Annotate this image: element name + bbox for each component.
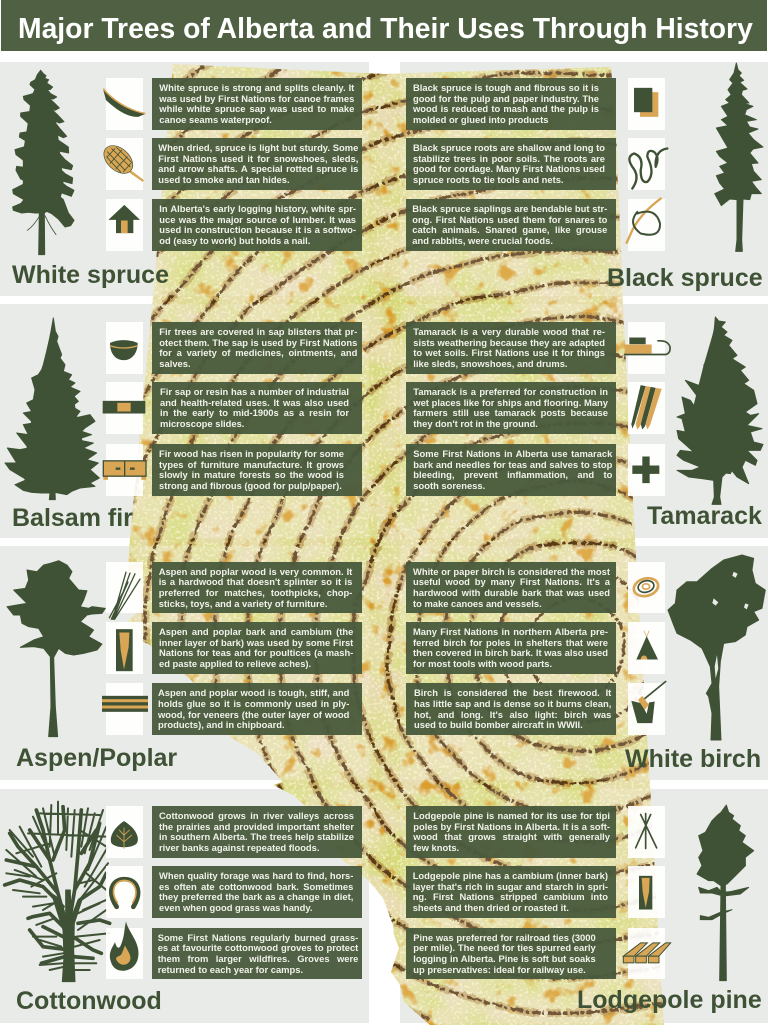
text: black spruce snares: Black spruce saplings are bendable but str-: [412, 203, 607, 214]
text: black spruce roots: good for cordage. Many First Nations used: [413, 163, 605, 174]
text: spruce snowshoes: First Nations used it for snowshoes, sleds,: [158, 153, 358, 164]
text: aspen plywood: holds glue so it is commonly used in ply-: [158, 698, 349, 709]
text: tamarack construction: Tamarack is a preferred for construction in: [413, 386, 608, 397]
icon: microscope slide: [106, 382, 143, 434]
text: birch vessels: White or paper birch is considered the most: [413, 566, 610, 577]
text: cottonwood horses: [152, 866, 362, 918]
text: tamarack medicine: bark and needles for teas and salves to stop: [413, 459, 612, 470]
text: aspen matches: preferred for matches, toothpicks, chop-: [159, 587, 352, 598]
text: birch vessels: [406, 562, 616, 613]
text: cottonwood horses: they preferred the bark as a change in diet,: [159, 891, 353, 902]
text: fir sap: otect them. The sap is used by First Nations: [159, 337, 357, 348]
text: tamarack durable: Tamarack is a very durable wood that re-: [413, 326, 605, 337]
text: spruce lumber: In Alberta's early logging history, white spr-: [159, 203, 356, 214]
text: black spruce pulp: wood is reduced to mash and the pulp is: [413, 103, 599, 114]
icon: bowl of sap: [106, 322, 143, 374]
text: cottonwood burning: [152, 928, 362, 979]
text: aspen poultices: inner layer of bark) was used by some First: [159, 637, 353, 648]
text: lodgepole cambium: Lodgepole pine has a cambium (inner bark): [413, 870, 608, 881]
heading: Lodgepole pine: Lodgepole pine: [577, 986, 762, 1014]
text: tamarack construction: [406, 382, 616, 434]
title banner: Major Trees of Alberta and Their Uses Through History: [18, 12, 753, 44]
text: spruce snowshoes: [152, 138, 362, 190]
text: fir resin: and health-related uses. It was also used: [160, 397, 349, 408]
text: cottonwood shelter: river banks against repeated floods.: [159, 842, 319, 853]
text: fir sap: for a variety of medicines, ointments, and: [159, 347, 357, 358]
text: aspen plywood: [152, 683, 362, 735]
text: birch shelters: [406, 622, 616, 674]
text: fir sap: salves.: [159, 358, 191, 369]
text: cottonwood horses: even when good grass was handy.: [159, 902, 313, 913]
icon: snowshoe: [106, 138, 143, 190]
text: fir furniture: slowly in mature forests so the wood is: [159, 469, 344, 480]
icon: paper pulp sheets: [628, 78, 665, 130]
text: tamarack durable: [406, 322, 616, 374]
text: spruce lumber: uce was the major source of lumber. It was: [159, 214, 356, 225]
text: birch firewood: has little sap and is dense so it burns clean,: [414, 698, 611, 709]
tree: cottonwood silhouette: [2, 800, 112, 982]
heading: Tamarack: Tamarack: [647, 502, 762, 530]
text: cottonwood shelter: Cottonwood grows in river valleys across: [159, 810, 354, 821]
text: cottonwood horses: When quality forage was hard to find, hors-: [159, 870, 353, 881]
icon: furniture cabinet: [106, 444, 143, 496]
icon: axe in stump: [628, 683, 665, 735]
text: black spruce snares: ong. First Nations used them for snares to: [412, 214, 607, 225]
text: tamarack construction: wet places like for ships and flooring. Many: [413, 397, 608, 408]
tree: lodgepole pine silhouette: [696, 804, 754, 982]
text: birch firewood: [406, 683, 616, 735]
text: tamarack medicine: bleeding, prevent inflammation, and to: [413, 469, 612, 480]
heading: Balsam fir: Balsam fir: [12, 504, 133, 532]
text: black spruce roots: Black spruce roots are shallow and long to: [413, 142, 605, 153]
text: birch firewood: hot, and long. It's also light: birch was: [414, 709, 611, 720]
text: birch vessels: useful wood by many First Nations. It's a: [413, 576, 610, 587]
text: cottonwood burning: Some First Nations regularly burned grass-: [158, 932, 358, 943]
text: spruce canoes: while white spruce sap was used to make: [159, 103, 354, 114]
panel: tamarack: [400, 304, 768, 538]
panel: cottonwood: [0, 789, 369, 1023]
text: fir sap: Fir trees are covered in sap blisters that pr-: [159, 326, 357, 337]
icon: fence posts: [628, 382, 665, 434]
text: cottonwood shelter: in southern Alberta. The trees help stabilize: [159, 831, 354, 842]
text: cottonwood burning: them from larger wildfires. Groves were: [158, 953, 358, 964]
panel: white spruce: [0, 62, 369, 296]
text: fir resin: [152, 382, 362, 434]
text: black spruce pulp: Black spruce is tough and fibrous so it is: [413, 82, 599, 93]
text: tamarack medicine: sooth soreness.: [413, 480, 485, 491]
text: birch shelters: ferred birch for poles in shelters that were: [413, 637, 608, 648]
text: aspen poultices: Nations for teas and for poultices (a mash-: [159, 647, 353, 658]
text: lodgepole cambium: [406, 866, 616, 918]
icon: sled: [628, 322, 665, 374]
icon: canoe: [106, 78, 143, 130]
text: lodgepole tipi poles: wood that grows straight with generally: [413, 831, 610, 842]
text: aspen matches: is a hardwood that doesn't splinter so it is: [159, 576, 352, 587]
text: lodgepole tipi poles: Lodgepole pine is named for its use for tipi: [413, 810, 610, 821]
text: birch shelters: Many First Nations in northern Alberta pre-: [413, 626, 608, 637]
text: aspen matches: [152, 562, 362, 613]
icon: coiled bark: [628, 562, 665, 613]
text: black spruce pulp: [406, 78, 616, 130]
text: tamarack durable: to wet soils. First Nations use it for things: [413, 347, 605, 358]
icon: flame: [106, 928, 143, 979]
panel: lodgepole pine: [400, 789, 768, 1023]
icon: snare: [628, 199, 665, 251]
icon: roots cordage: [628, 138, 665, 190]
text: aspen matches: Aspen and poplar wood is very common. It: [159, 566, 352, 577]
text: lodgepole cambium: sheets and then dried or roasted it.: [413, 902, 569, 913]
tree: black spruce silhouette: [714, 62, 764, 252]
text: lodgepole tipi poles: [406, 806, 616, 858]
text: aspen plywood: wood, for veneers (the outer layer of wood: [158, 709, 349, 720]
icon: tipi poles: [628, 806, 665, 858]
text: lodgepole railroad ties: [406, 928, 616, 979]
icon: horseshoe: [106, 866, 143, 918]
text: spruce canoes: [152, 78, 362, 130]
text: fir resin: microscope slides.: [160, 418, 244, 429]
text: black spruce pulp: molded or glued into products: [413, 114, 548, 125]
text: lodgepole cambium: ng. First Nations stripped cambium into: [413, 891, 608, 902]
text: aspen poultices: ed paste applied to relieve aches).: [159, 658, 311, 669]
text: lodgepole railroad ties: Pine was preferred for railroad ties (3000: [413, 932, 596, 943]
text: cottonwood shelter: [152, 806, 362, 858]
text: cottonwood burning: es at favourite cottonwood groves to protect: [158, 942, 358, 953]
text: spruce lumber: od (easy to work) but holds a nail.: [159, 235, 310, 246]
text: spruce snowshoes: and arrow shafts. A special rotted spruce is: [158, 163, 358, 174]
text: lodgepole tipi poles: poles by First Nations in Alberta. It is a soft-: [413, 821, 610, 832]
text: aspen plywood: products), and in chipboard.: [158, 719, 285, 730]
text: cottonwood horses: es often ate cottonwood bark. Sometimes: [159, 881, 353, 892]
text: spruce snowshoes: When dried, spruce is light but sturdy. Some: [158, 142, 358, 153]
text: black spruce roots: spruce roots to tie tools and nets.: [413, 174, 564, 185]
text: fir furniture: Fir wood has risen in popularity for some: [159, 448, 344, 459]
text: tamarack durable: like sleds, snowshoes, and drums.: [413, 358, 568, 369]
text: lodgepole cambium: layer that's rich in sugar and starch in spri-: [413, 881, 608, 892]
icon: birch bark shelter: [628, 622, 665, 674]
icon: toothpicks: [106, 562, 143, 613]
text: birch firewood: Birch is considered the best firewood. It: [414, 687, 611, 698]
text: birch firewood: used to build bomber aircraft in WWII.: [414, 719, 583, 730]
heading: Black spruce: Black spruce: [607, 264, 763, 292]
text: lodgepole railroad ties: logging in Alberta. Pine is soft but soaks: [413, 953, 596, 964]
heading: White birch: White birch: [625, 745, 761, 773]
text: tamarack durable: sists weathering because they are adapted: [413, 337, 605, 348]
text: aspen matches: sticks, toys, and a variety of furniture.: [159, 598, 328, 609]
text: black spruce snares: and rabbits, were crucial foods.: [412, 235, 553, 246]
text: spruce snowshoes: used to smoke and tan hides.: [158, 174, 290, 185]
map: Alberta-shaped tree ring texture: [128, 64, 664, 1025]
text: black spruce snares: [406, 199, 616, 251]
panel: white birch: [400, 546, 768, 780]
text: black spruce roots: stabilize trees in poor soils. The roots are: [413, 153, 605, 164]
text: birch vessels: to make canoes and vessels.: [413, 598, 542, 609]
text: spruce canoes: canoe seams waterproof.: [159, 114, 272, 125]
heading: White spruce: White spruce: [12, 261, 169, 289]
icon: plywood layers: [106, 683, 143, 735]
text: lodgepole railroad ties: up preservatives: ideal for railway use.: [413, 964, 586, 975]
tree: aspen silhouette: [6, 560, 106, 738]
text: lodgepole tipi poles: few knots.: [413, 842, 459, 853]
text: black spruce pulp: good for the pulp and paper industry. The: [413, 93, 599, 104]
tree: white birch silhouette: [668, 554, 766, 740]
tree: balsam fir silhouette: [4, 318, 100, 500]
heading: Cottonwood: Cottonwood: [16, 987, 162, 1015]
icon: cambium strip: [628, 866, 665, 918]
tree: tamarack silhouette: [676, 316, 764, 505]
text: birch vessels: hardwood with durable bark that was used: [413, 587, 610, 598]
text: fir furniture: strong and fibrous (good for pulp/paper).: [159, 480, 342, 491]
text: fir furniture: types of furniture manufacture. It grows: [159, 459, 344, 470]
text: aspen plywood: Aspen and poplar wood is tough, stiff, and: [158, 687, 349, 698]
icon: railroad ties: [628, 928, 665, 979]
icon: leaf: [106, 806, 143, 858]
text: aspen poultices: [152, 622, 362, 674]
text: lodgepole railroad ties: per mile). The need for ties spurred early: [413, 942, 596, 953]
text: black spruce snares: catch animals. Snared game, like grouse: [412, 224, 607, 235]
text: spruce lumber: used in construction because it is a softwo-: [159, 224, 356, 235]
text: spruce canoes: White spruce is strong and splits cleanly. It: [159, 82, 354, 93]
text: aspen poultices: Aspen and poplar bark and cambium (the: [159, 626, 353, 637]
title banner: [1, 0, 767, 51]
text: birch shelters: for most tools with wood parts.: [413, 658, 552, 669]
text: birch shelters: then covered in birch bark. It was also used: [413, 647, 608, 658]
panel: balsam fir: [0, 304, 369, 538]
tree: white spruce silhouette: [12, 70, 74, 256]
heading: Aspen/Poplar: Aspen/Poplar: [16, 744, 177, 772]
text: fir sap: [152, 322, 362, 374]
panel: aspen and poplar: [0, 546, 369, 780]
text: tamarack medicine: Some First Nations in Alberta use tamarack: [413, 448, 612, 459]
text: cottonwood burning: returned to each year for camps.: [158, 964, 303, 975]
text: cottonwood shelter: the prairies and provided important shelter: [159, 821, 354, 832]
text: fir furniture: [152, 444, 362, 496]
text: spruce canoes: was used by First Nations for canoe frames: [159, 93, 354, 104]
text: tamarack medicine: [406, 444, 616, 496]
icon: medical cross: [628, 444, 665, 496]
text: tamarack construction: they don't rot in the ground.: [413, 418, 538, 429]
panel: black spruce: [400, 62, 768, 296]
icon: house: [106, 199, 143, 251]
text: tamarack construction: farmers still use tamarack posts because: [413, 407, 608, 418]
text: black spruce roots: [406, 138, 616, 190]
text: spruce lumber: [152, 199, 362, 251]
text: fir resin: Fir sap or resin has a number of industrial: [160, 386, 349, 397]
icon: bark cambium: [106, 622, 143, 674]
text: fir resin: in the early to mid-1900s as a resin for: [160, 407, 349, 418]
